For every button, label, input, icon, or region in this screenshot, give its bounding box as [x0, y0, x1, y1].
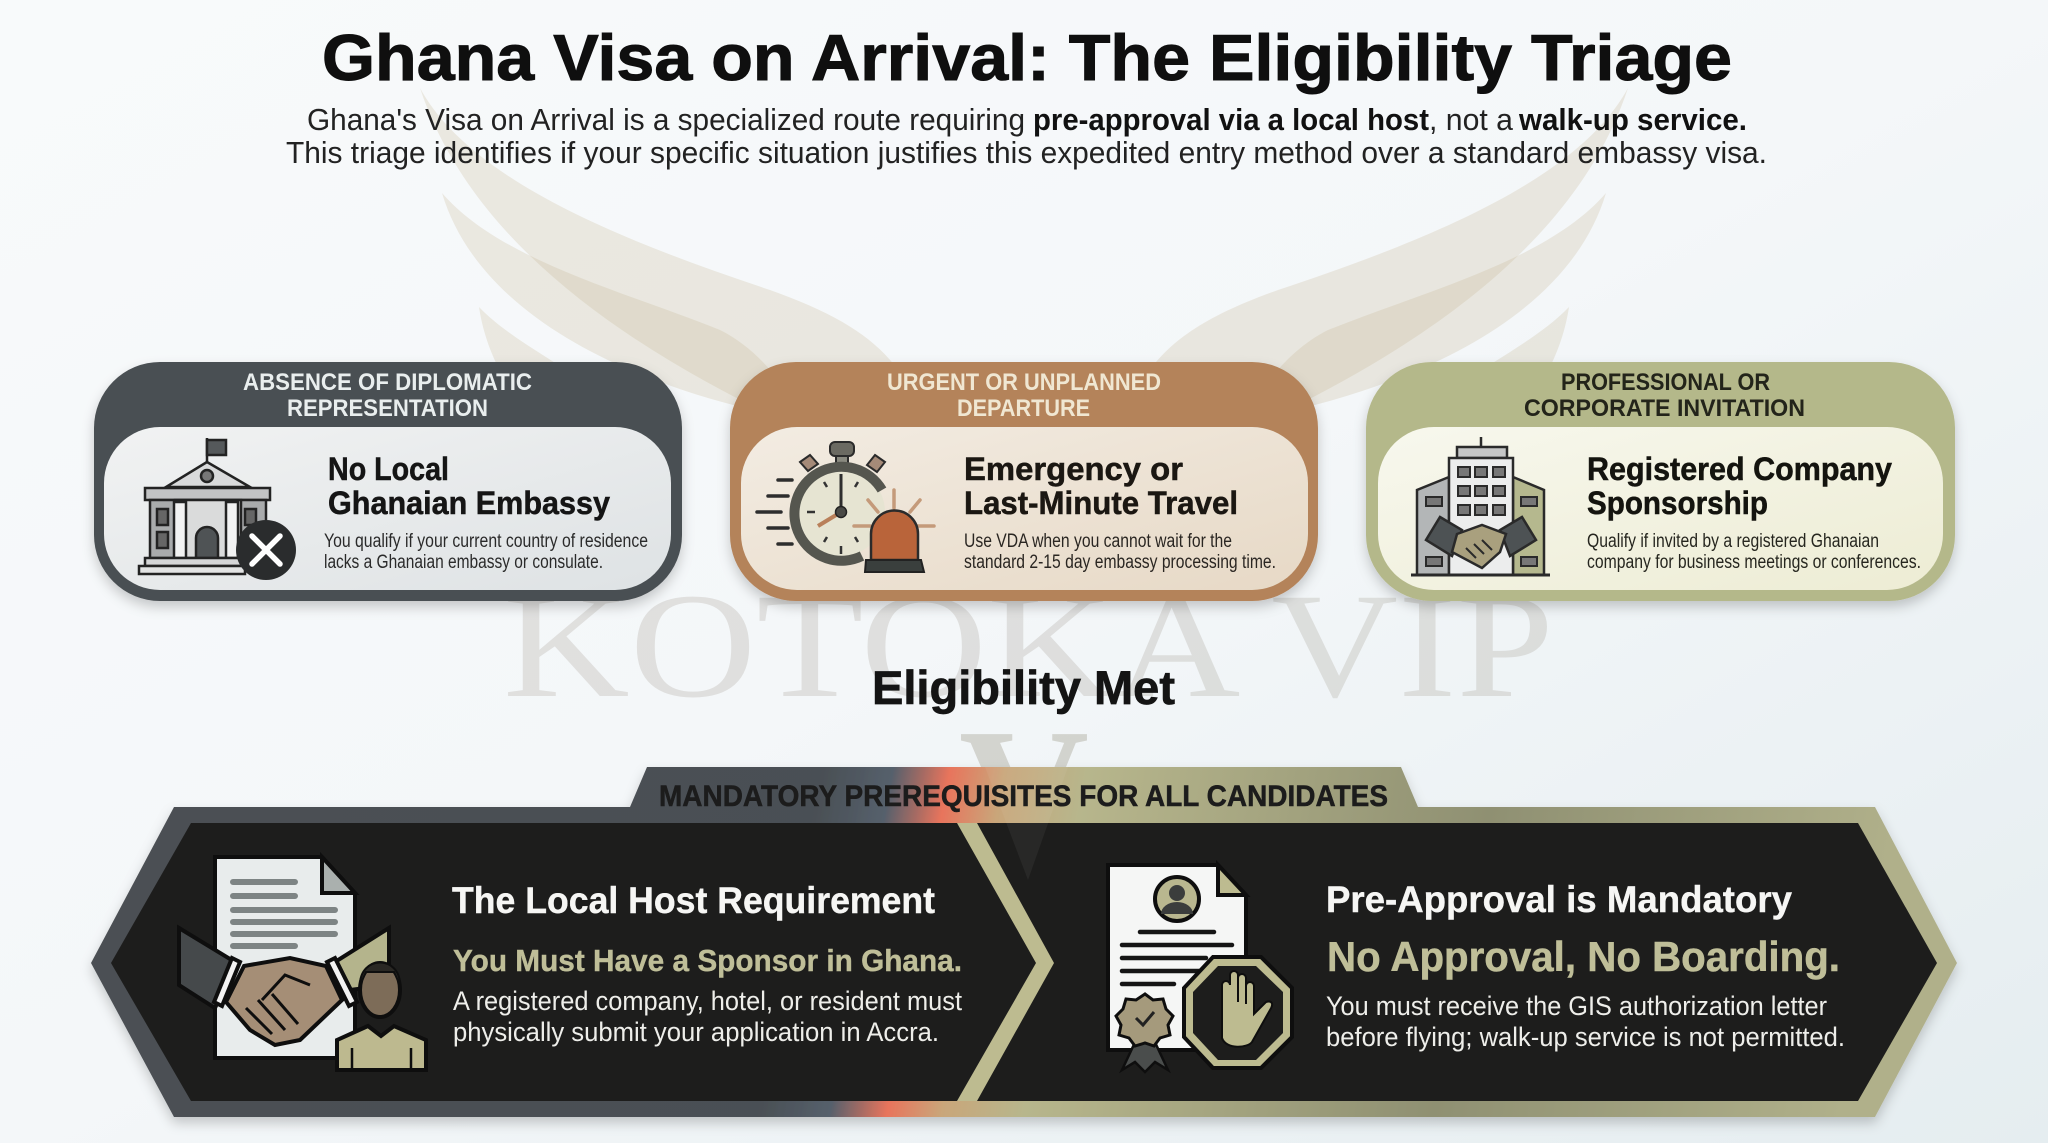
subtitle: walk-up service. — [1518, 102, 1747, 137]
watermark: winged logo: KOTOKA VIP — [503, 563, 1554, 729]
watermark: winged logo: V — [959, 692, 1089, 891]
card description — [1587, 531, 1921, 573]
panel: professional or corporate invitation — [1366, 362, 1955, 601]
card description: company for business meetings or conferences. — [1587, 552, 1921, 573]
card title: Sponsorship — [1587, 485, 1768, 521]
left highlight: You Must Have a Sponsor in Ghana. — [453, 943, 962, 978]
card description: You qualify if your current country of residence — [324, 531, 648, 552]
subtitle — [286, 102, 1767, 170]
left description: physically submit your application in Accra. — [453, 1017, 939, 1047]
right heading: Pre-Approval is Mandatory — [1326, 879, 1792, 920]
card description: standard 2-15 day embassy processing time. — [964, 552, 1276, 573]
icon: office and handshake — [1411, 437, 1550, 575]
card title: Registered Company — [1587, 451, 1892, 487]
card description — [964, 531, 1276, 573]
subtitle: pre-approval via a local host — [1033, 102, 1429, 137]
right highlight: No Approval, No Boarding. — [1327, 933, 1840, 980]
icon: stopwatch and siren — [757, 442, 934, 572]
left description: A registered company, hotel, or resident must — [453, 986, 962, 1016]
heading: eligibility met: Eligibility Met — [872, 661, 1175, 714]
card title: Emergency or — [964, 451, 1183, 487]
left description — [453, 986, 962, 1047]
panel: absence of diplomatic representation — [94, 362, 682, 601]
card heading: DEPARTURE — [957, 395, 1090, 422]
tab label: MANDATORY PREREQUISITES FOR ALL CANDIDATES — [659, 780, 1388, 813]
card heading — [887, 369, 1161, 422]
subtitle: , not a — [1429, 102, 1514, 137]
card heading: CORPORATE INVITATION — [1524, 395, 1805, 422]
icon: host document and handshake — [179, 857, 426, 1070]
card title — [964, 451, 1238, 521]
title: Ghana Visa on Arrival: The Eligibility Triage — [322, 21, 1732, 94]
card title: No Local — [328, 451, 449, 487]
subtitle: Ghana's Visa on Arrival is a specialized route requiring — [307, 102, 1025, 137]
card title — [1587, 451, 1892, 521]
icon: embassy building with cross — [139, 438, 296, 580]
card title: Last-Minute Travel — [964, 485, 1238, 521]
right description — [1326, 991, 1845, 1052]
card heading: URGENT OR UNPLANNED — [887, 369, 1161, 396]
card description: Use VDA when you cannot wait for the — [964, 531, 1232, 552]
panel: urgent or unplanned departure — [730, 362, 1318, 601]
card heading: ABSENCE OF DIPLOMATIC — [243, 369, 532, 396]
card title — [328, 451, 610, 521]
card heading — [1524, 369, 1805, 422]
right description: You must receive the GIS authorization letter — [1326, 991, 1827, 1021]
panel: mandatory prerequisites banner — [91, 767, 1957, 1117]
card description: Qualify if invited by a registered Ghanaian — [1587, 531, 1879, 552]
left heading: The Local Host Requirement — [452, 880, 935, 921]
subtitle: This triage identifies if your specific situation justifies this expedited entry method over a standard embassy visa. — [286, 135, 1767, 170]
card description: lacks a Ghanaian embassy or consulate. — [324, 552, 603, 573]
card heading: REPRESENTATION — [287, 395, 488, 422]
card heading: PROFESSIONAL OR — [1561, 369, 1770, 396]
card title: Ghanaian Embassy — [328, 485, 610, 521]
card description — [324, 531, 648, 573]
chevron divider — [957, 823, 1054, 1101]
card heading — [243, 369, 532, 422]
watermark: winged logo — [420, 88, 1628, 891]
right description: before flying; walk-up service is not permitted. — [1326, 1022, 1845, 1052]
icon: approval document and stop hand — [1108, 865, 1292, 1072]
